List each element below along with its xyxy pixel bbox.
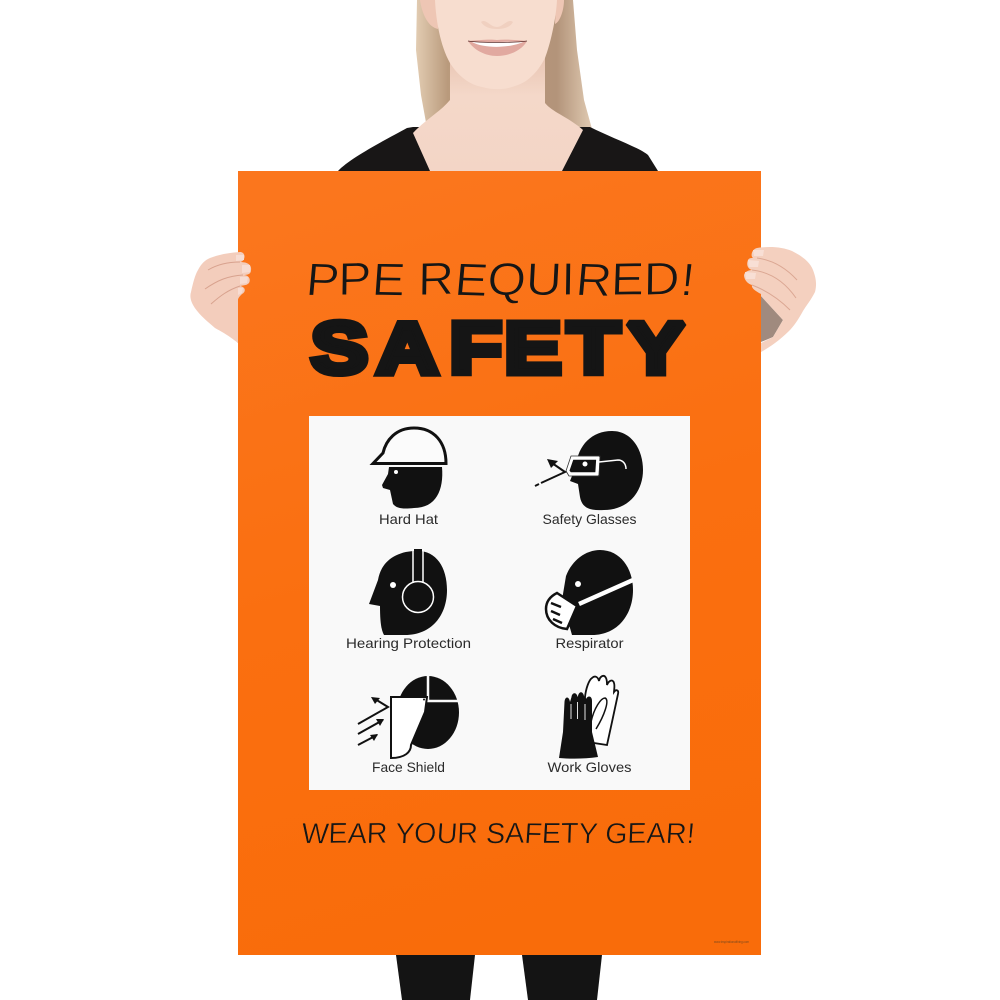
- black shirt: [338, 127, 658, 171]
- label: safety glasses: Safety Glasses: [542, 511, 636, 527]
- nose shading: [481, 21, 513, 29]
- right leg: [522, 955, 602, 1000]
- right hand: [744, 247, 816, 352]
- orange poster: [238, 171, 761, 955]
- icon: safety glasses: [535, 431, 643, 510]
- label: face shield: Face Shield: [372, 759, 445, 775]
- ears: [420, 0, 564, 29]
- left arm shadow: [222, 300, 238, 343]
- neck and chest: [413, 55, 583, 171]
- label: respirator: Respirator: [556, 635, 624, 651]
- heading: PPE required: PPE REQUIRED!: [304, 252, 697, 306]
- left hand: [190, 252, 251, 343]
- label: work gloves: Work Gloves: [548, 759, 632, 775]
- icon: hard hat: [373, 428, 446, 509]
- heading: safety: SAFETY: [311, 308, 684, 389]
- icon: hearing protection: [369, 549, 447, 635]
- face: [435, 0, 557, 89]
- website credit: www.inspirationalthing.com: [714, 939, 749, 944]
- panel: PPE icons: [309, 416, 690, 790]
- panel background: [309, 416, 690, 790]
- icon: face shield: [358, 672, 462, 758]
- left leg: [396, 955, 475, 1000]
- icon: work gloves: [559, 676, 618, 759]
- hair: [416, 0, 592, 129]
- person holding poster: [222, 0, 783, 1000]
- label: hearing protection: Hearing Protection: [346, 635, 471, 651]
- slogan: WEAR YOUR SAFETY GEAR!: [301, 818, 696, 850]
- right arm shadow: [761, 296, 783, 342]
- mouth: [468, 40, 527, 56]
- label: hard hat: Hard Hat: [379, 511, 438, 527]
- icon: respirator: [546, 550, 633, 635]
